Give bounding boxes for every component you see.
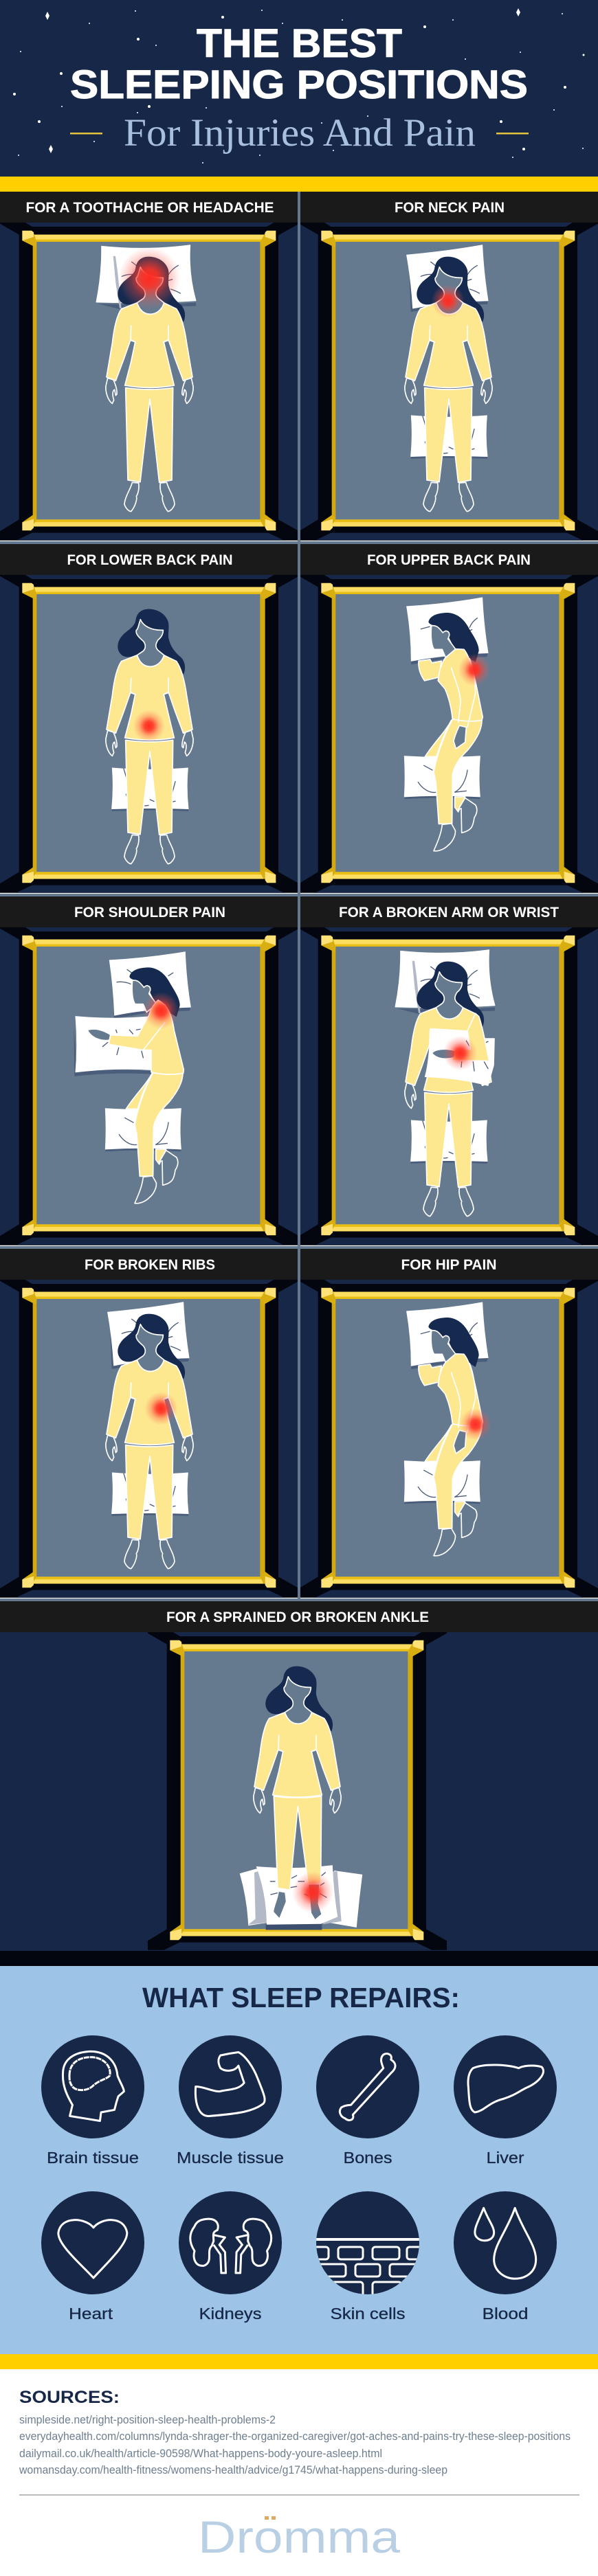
panel label bbox=[0, 1249, 298, 1280]
icon: liver: Liver bbox=[487, 2149, 524, 2167]
sources block bbox=[19, 2388, 571, 2476]
subtitle: For Injuries And Pain bbox=[124, 111, 476, 155]
panel label bbox=[0, 1601, 598, 1632]
panel label: FOR SHOULDER PAIN bbox=[74, 905, 225, 920]
bed illustration bbox=[299, 1280, 598, 1598]
panel: neck pain bbox=[299, 192, 598, 541]
panel label: FOR UPPER BACK PAIN bbox=[367, 552, 531, 568]
pain glow: ankle bbox=[292, 1871, 333, 1913]
panel label bbox=[0, 544, 298, 575]
panel label: FOR A TOOTHACHE OR HEADACHE bbox=[26, 200, 274, 216]
panel label bbox=[300, 1249, 598, 1280]
icon: blood: Blood bbox=[483, 2305, 528, 2323]
bed illustration bbox=[0, 927, 299, 1245]
panel label bbox=[300, 544, 598, 575]
panel label bbox=[0, 192, 298, 223]
panel label bbox=[300, 192, 598, 223]
panel label: FOR NECK PAIN bbox=[395, 200, 505, 216]
panel: upper back pain bbox=[299, 544, 598, 893]
logo: Drömma bbox=[198, 2511, 400, 2562]
title: SLEEPING POSITIONS bbox=[70, 63, 528, 107]
pain glow: head bbox=[118, 247, 180, 310]
side wall backdrop bbox=[0, 1632, 598, 1966]
icon: skin cells: Skin cells bbox=[330, 2305, 406, 2323]
icon: blood bbox=[454, 2191, 557, 2323]
icon: muscle tissue bbox=[177, 2035, 284, 2167]
panel label: FOR LOWER BACK PAIN bbox=[67, 552, 232, 568]
icon: skin cells bbox=[316, 2191, 419, 2319]
pain glow: neck bbox=[432, 284, 465, 317]
pain glow: hip bbox=[459, 1408, 491, 1440]
icon: heart bbox=[41, 2191, 144, 2323]
pain glow: ribs bbox=[144, 1392, 177, 1425]
icon: bones: Bones bbox=[344, 2149, 392, 2167]
bed illustration bbox=[0, 575, 299, 893]
panel label: FOR HIP PAIN bbox=[401, 1257, 496, 1273]
panel: hip pain bbox=[299, 1249, 598, 1598]
icon: kidneys: Kidneys bbox=[199, 2305, 261, 2323]
bed illustration bbox=[0, 223, 299, 541]
repairs heading: WHAT SLEEP REPAIRS: bbox=[142, 1982, 460, 2013]
icon: muscle tissue: Muscle tissue bbox=[177, 2149, 284, 2167]
panel: what sleep repairs bbox=[0, 1966, 598, 2354]
icon: brain tissue bbox=[41, 2035, 144, 2167]
repairs background bbox=[0, 1966, 598, 2354]
icon: brain tissue: Brain tissue bbox=[47, 2149, 139, 2167]
sources block: simpleside.net/right-position-sleep-health-problems-2 bbox=[19, 2414, 276, 2426]
panel: broken arm or wrist bbox=[299, 896, 598, 1245]
sources block: womansday.com/health-fitness/womens-health/advice/g1745/what-happens-during-sleep bbox=[19, 2464, 447, 2476]
pain glow: upper back bbox=[458, 653, 490, 686]
icon: bones bbox=[316, 2035, 419, 2167]
sources block: everydayhealth.com/columns/lynda-shrager-the-organized-caregiver/got-aches-and-pains-try-these-sleep-positions bbox=[19, 2430, 571, 2443]
panel label bbox=[300, 896, 598, 927]
panel: toothache or headache bbox=[0, 192, 299, 541]
panel: shoulder pain bbox=[0, 896, 299, 1245]
icon: liver bbox=[454, 2035, 557, 2167]
footer rule bbox=[19, 2494, 579, 2496]
title bbox=[70, 21, 528, 107]
panel dividers bbox=[0, 192, 598, 1601]
panel label: FOR A SPRAINED OR BROKEN ANKLE bbox=[166, 1609, 429, 1625]
bed illustration bbox=[0, 1280, 299, 1598]
pain glow: shoulder bbox=[143, 992, 179, 1029]
pain glow: lower back bbox=[133, 710, 165, 743]
bed illustration bbox=[299, 927, 598, 1245]
header background bbox=[0, 0, 598, 177]
sources block: SOURCES: bbox=[19, 2388, 120, 2407]
pain glow: wrist bbox=[443, 1036, 477, 1070]
sources block: dailymail.co.uk/health/article-90598/What-happens-body-youre-asleep.html bbox=[19, 2448, 382, 2460]
bottom band bbox=[0, 1951, 598, 1967]
panel label bbox=[0, 896, 298, 927]
yellow band bbox=[0, 177, 598, 192]
icon: kidneys bbox=[179, 2191, 282, 2323]
icon: heart: Heart bbox=[69, 2305, 113, 2323]
bed illustration bbox=[148, 1632, 447, 1950]
bed illustration bbox=[299, 575, 598, 893]
bed illustration bbox=[299, 223, 598, 541]
panel: broken ribs bbox=[0, 1249, 299, 1598]
panel label: FOR BROKEN RIBS bbox=[85, 1257, 215, 1273]
star field bbox=[13, 8, 584, 163]
title: THE BEST bbox=[197, 21, 402, 66]
panel: sprained or broken ankle bbox=[0, 1601, 598, 1967]
yellow band bbox=[0, 2354, 598, 2369]
panel: lower back pain bbox=[0, 544, 299, 893]
panel label: FOR A BROKEN ARM OR WRIST bbox=[339, 905, 559, 920]
